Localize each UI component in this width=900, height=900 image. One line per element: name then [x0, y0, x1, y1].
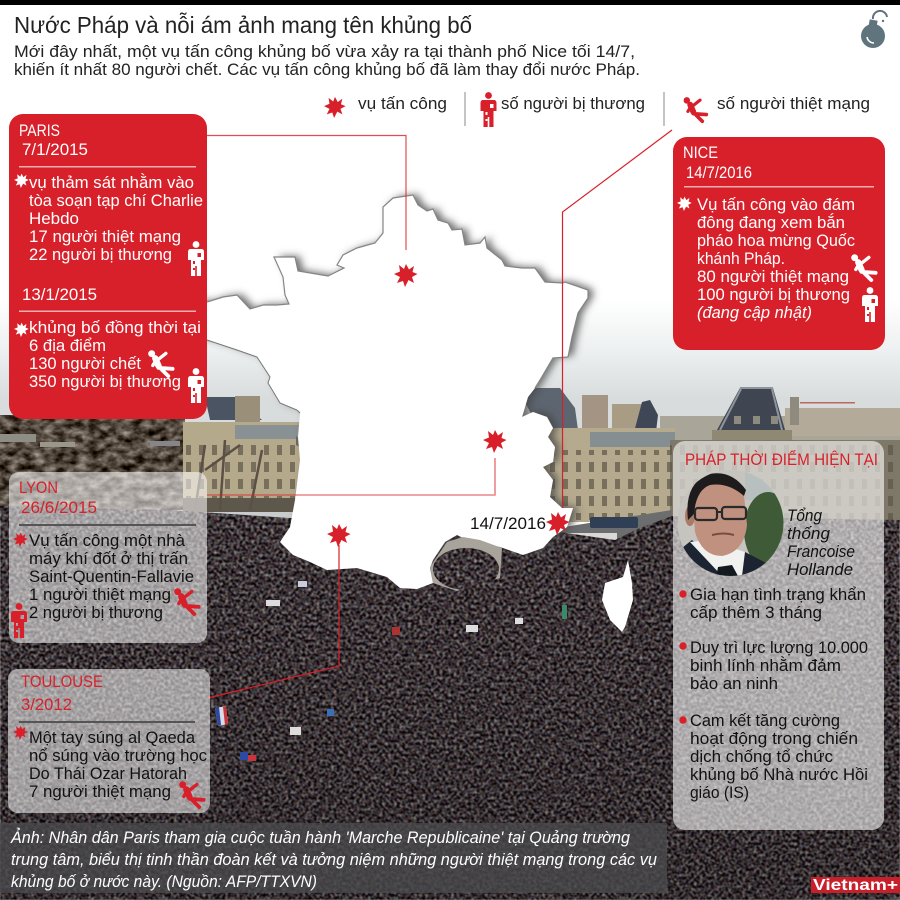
Nice text: 80 người thiệt mạng [697, 267, 849, 286]
Toulouse heading: TOULOUSE [21, 672, 103, 691]
intro text [14, 42, 640, 79]
attack markers on map [327, 264, 570, 547]
background photo: Paris rally [0, 300, 900, 900]
logo: Vietnam+: Vietnam+ [813, 877, 898, 894]
bullet: emergency [679, 585, 866, 622]
map of France [195, 195, 633, 632]
Nice text: (đang cập nhật) [697, 303, 812, 322]
Nice text: khánh Pháp. [697, 249, 785, 268]
bullet: campaign: dịch chống tổ chức [690, 747, 833, 766]
portrait caption: Hollande [787, 560, 853, 579]
bullet: campaign [679, 711, 868, 802]
Paris heading: 7/1/2015 [22, 140, 88, 159]
photo: distant skyline right [660, 388, 900, 446]
legend: attack: vụ tấn công [358, 94, 447, 113]
title: Nước Pháp và nỗi ám ảnh mang tên khủng bố [14, 12, 472, 38]
intro text: khiến ít nhất 80 người chết. Các vụ tấn công khủng bố đã làm thay đổi nước Pháp. [14, 60, 640, 79]
Paris 7/1 text [29, 173, 203, 264]
Paris 7/1 text: tòa soạn tạp chí Charlie [29, 191, 203, 210]
Paris 13/1 date: 13/1/2015 [22, 285, 97, 304]
date label for Nice: 14/7/2016 [470, 514, 546, 533]
legend: attack [324, 94, 447, 118]
Corsica [602, 560, 633, 632]
bullet: campaign: khủng bố Nhà nước Hồi [690, 765, 868, 784]
Lyon text: máy khí đốt ở thị trấn [29, 549, 188, 568]
Paris icons [14, 174, 204, 403]
legend: deaths [684, 94, 870, 121]
legend: injured [480, 92, 645, 127]
bullet: campaign: giáo (IS) [690, 783, 749, 802]
Paris 13/1 text: 350 người bị thương [29, 372, 181, 391]
Nice text: pháo hoa mừng Quốc [697, 231, 855, 250]
Nice icons [677, 197, 878, 322]
Paris 13/1 text: 130 người chết [29, 354, 141, 373]
Lyon heading [19, 478, 97, 517]
Toulouse text: Một tay súng al Qaeda [29, 728, 196, 747]
photo: crowd [0, 500, 900, 900]
Paris 13/1 text: 6 địa điểm [29, 336, 106, 355]
Paris 7/1 text: Hebdo [29, 209, 79, 228]
Lyon text: Saint-Quentin-Fallavie [29, 567, 194, 586]
Toulouse text: nổ súng vào trường học [29, 746, 207, 765]
Nice text: đông đang xem bắn [697, 213, 845, 232]
Nice heading [683, 143, 752, 182]
bullet: emergency: Gia hạn tình trạng khẩn [690, 585, 866, 604]
photo: right building [522, 388, 900, 522]
Lyon text: 1 người thiệt mạng [29, 585, 171, 604]
panel: Lyon [9, 472, 207, 643]
panel: Nice [673, 137, 885, 350]
Lyon heading: LYON [19, 478, 58, 497]
top black bar [0, 0, 900, 5]
panel heading: PHÁP THỜI ĐIỂM HIỆN TẠI [685, 450, 878, 469]
bullet: soldiers: binh lính nhằm đảm [690, 656, 841, 675]
Lyon text [29, 531, 194, 622]
Paris heading: PARIS [19, 121, 60, 140]
portrait caption: thống [787, 524, 831, 543]
photo caption [0, 823, 667, 893]
photo caption: trung tâm, biểu thị tinh thần đoàn kết và tưởng niệm những người thiệt mạng trong các vụ [11, 850, 658, 869]
photo caption: Ảnh: Nhân dân Paris tham gia cuộc tuần hành 'Marche Republicaine' tại Quảng trường [10, 828, 631, 847]
photo: left trees and distant buildings [0, 415, 185, 510]
connector lines [207, 130, 672, 698]
intro text: Mới đây nhất, một vụ tấn công khủng bố vừa xảy ra tại thành phố Nice tối 14/7, [14, 42, 635, 61]
Toulouse text: 7 người thiệt mạng [29, 782, 171, 801]
photo: vans and road [545, 510, 672, 551]
bullet: campaign: Cam kết tăng cường [690, 711, 840, 730]
Nice text: Vụ tấn công vào đám [697, 195, 855, 214]
panel: Paris [9, 114, 207, 419]
Paris 13/1 text [29, 318, 201, 391]
bullet: campaign: hoạt động trong chiến [690, 729, 858, 748]
Toulouse text: Do Thái Ozar Hatorah [29, 764, 187, 783]
Lyon text: 2 người bị thương [29, 603, 163, 622]
Toulouse icons [13, 726, 204, 807]
legend [324, 92, 870, 127]
Toulouse heading: 3/2012 [21, 695, 72, 714]
Paris 7/1 text: 22 người bị thương [29, 245, 172, 264]
Nice heading: 14/7/2016 [686, 163, 752, 182]
Paris heading [19, 121, 88, 159]
portrait: Francois Hollande [678, 472, 784, 576]
Nice text: 100 người bị thương [697, 285, 850, 304]
panel: France today [673, 441, 884, 830]
Paris 7/1 text: vụ thảm sát nhằm vào [29, 173, 194, 192]
Lyon icons [11, 533, 199, 638]
legend: injured: số người bị thương [501, 94, 645, 113]
bullet: emergency: cấp thêm 3 tháng [690, 603, 822, 622]
photo: monument over map [430, 537, 502, 591]
bullet: soldiers: bảo an ninh [690, 674, 778, 693]
Nice text [697, 195, 855, 322]
Lyon heading: 26/6/2015 [21, 498, 97, 517]
portrait caption: Francoise [787, 542, 855, 561]
bullet: soldiers: Duy trì lực lượng 10.000 [690, 638, 868, 657]
portrait caption [787, 506, 855, 579]
panel: Toulouse [8, 669, 210, 813]
legend: deaths: số người thiệt mạng [717, 94, 870, 113]
Lyon text: Vụ tấn công một nhà [29, 531, 186, 550]
icon: bomb [861, 11, 887, 48]
bullet: soldiers [679, 638, 868, 693]
photo: left building [183, 396, 313, 512]
Toulouse text [29, 728, 207, 801]
photo caption: khủng bố ở nước này. (Nguồn: AFP/TTXVN) [11, 872, 317, 891]
Nice heading: NICE [683, 143, 718, 162]
Toulouse heading [21, 672, 103, 714]
Paris 7/1 text: 17 người thiệt mạng [29, 227, 181, 246]
Paris 13/1 text: khủng bố đồng thời tại [29, 318, 201, 337]
portrait caption: Tổng [787, 506, 822, 525]
